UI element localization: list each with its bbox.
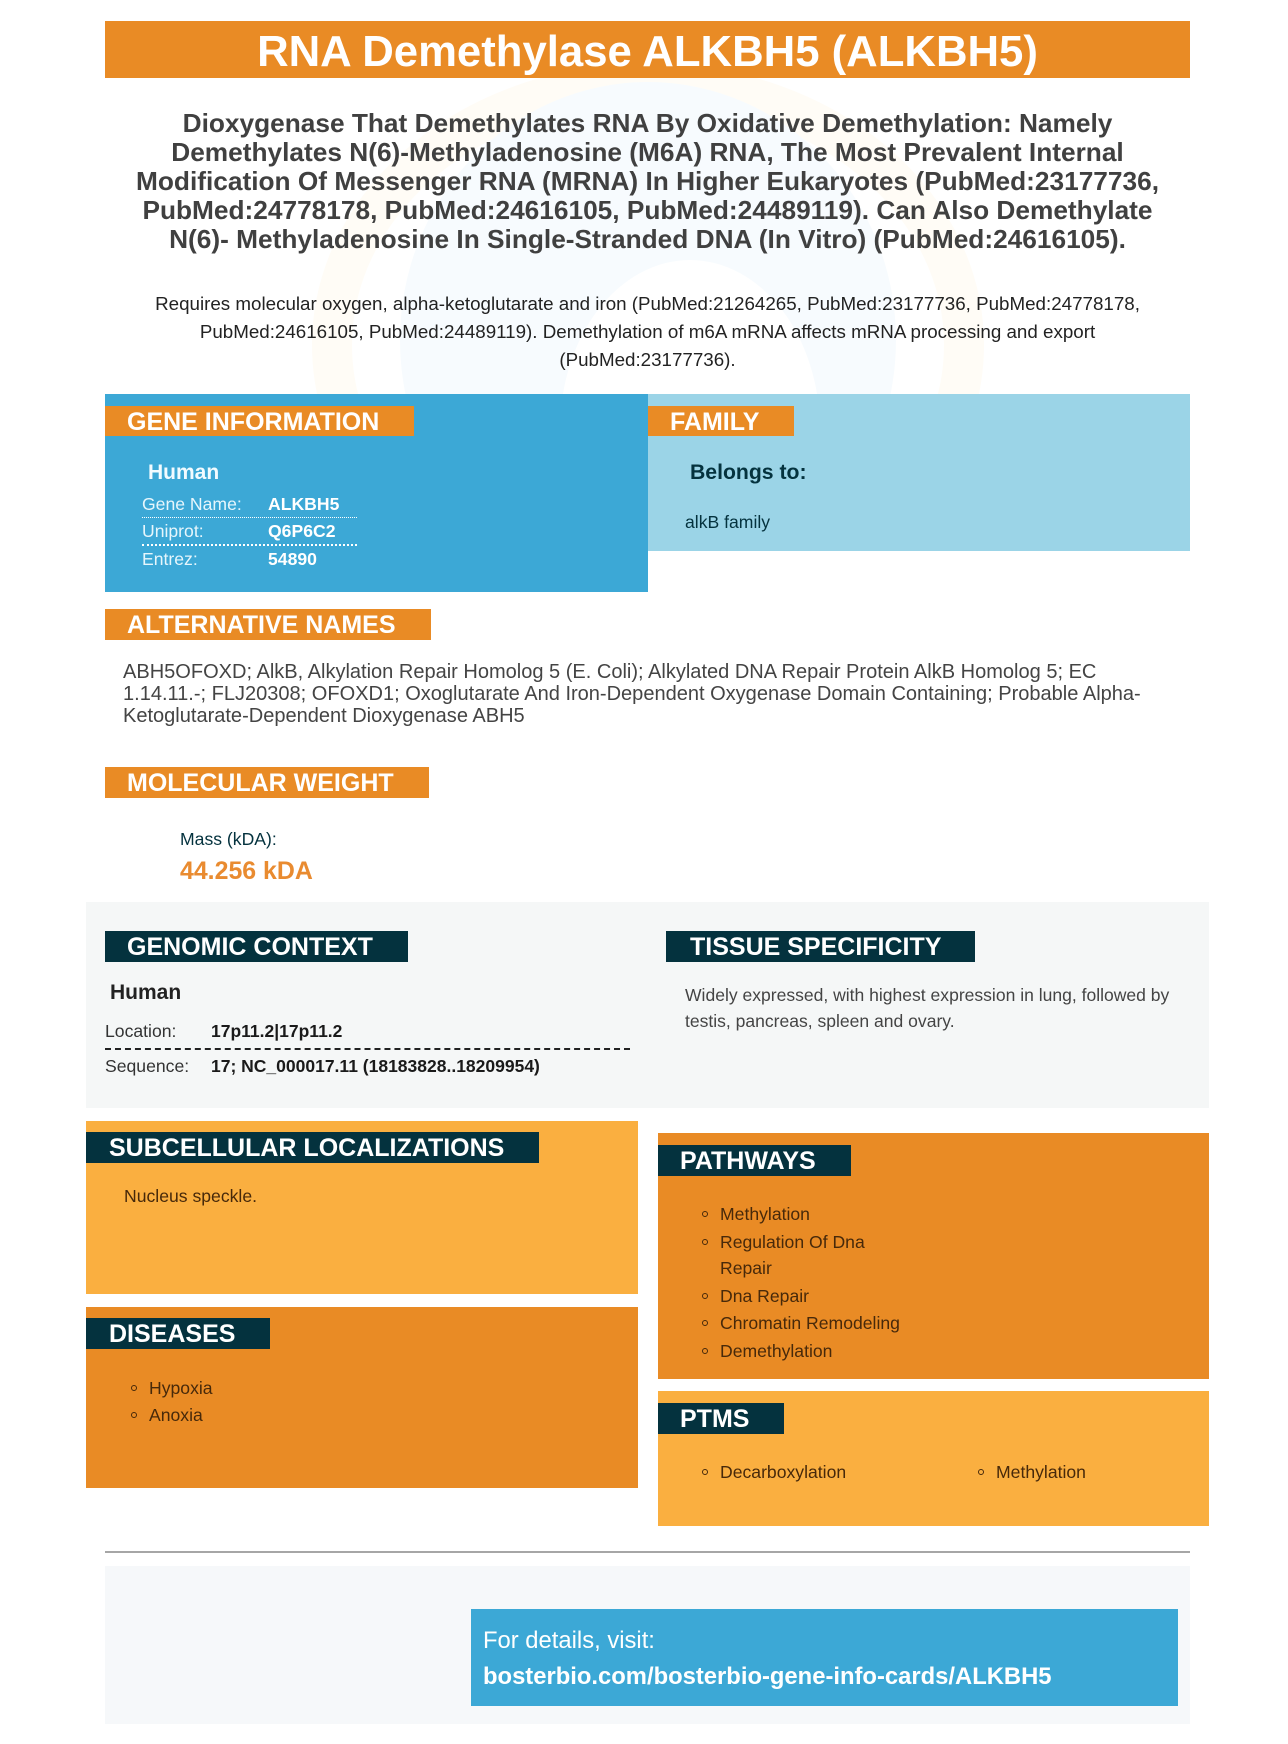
function paragraph	[155, 293, 1140, 370]
function paragraph: Requires molecular oxygen, alpha-ketoglutarate and iron (PubMed:21264265, PubMed:23177736, PubMed:24778178,	[155, 293, 1140, 314]
panel: gene information: ALKBH5	[268, 494, 339, 514]
belongs to label: Belongs to:	[690, 461, 807, 484]
heading: molecular weight: MOLECULAR WEIGHT	[127, 769, 394, 797]
alternative names text	[123, 661, 1141, 727]
subtitle description: PubMed:24778178, PubMed:24616105, PubMed:24489119). Can Also Demethylate	[142, 195, 1153, 225]
heading: family: FAMILY	[670, 408, 759, 436]
subtitle description: N(6)- Methyladenosine In Single-Stranded DNA (In Vitro) (PubMed:24616105).	[169, 224, 1126, 254]
heading: tissue specificity: TISSUE SPECIFICITY	[690, 933, 941, 961]
pathway list: Dna Repair	[720, 1286, 809, 1306]
heading: family	[648, 406, 794, 436]
disease list: Anoxia	[149, 1405, 203, 1425]
heading: genomic context: GENOMIC CONTEXT	[127, 933, 373, 961]
visit label: For details, visit:	[483, 1627, 655, 1654]
panel: family	[648, 394, 1190, 551]
pathway list: Demethylation	[720, 1341, 832, 1361]
function paragraph: PubMed:24616105, PubMed:24489119). Demethylation of m6A mRNA affects mRNA processing and export	[200, 321, 1095, 342]
panel: genomic context and tissue specificity	[86, 902, 1209, 1108]
panel: ptms	[658, 1391, 1209, 1526]
ptm list	[702, 1462, 1086, 1482]
family value: alkB family	[685, 512, 770, 532]
title banner: RNA Demethylase ALKBH5 (ALKBH5)	[257, 27, 1038, 76]
alternative names text: 1.14.11.-; FLJ20308; OFOXD1; Oxoglutarate And Iron-Dependent Oxygenase Domain Containing; Probable Alpha-	[123, 683, 1141, 705]
species label: Human	[148, 461, 219, 484]
callout: details link	[471, 1609, 1178, 1706]
uniprot row: Uniprot:	[142, 521, 204, 541]
pathway list: Methylation	[720, 1204, 810, 1224]
heading: pathways	[658, 1145, 851, 1176]
disease list: Hypoxia	[149, 1378, 213, 1398]
panel: pathways	[658, 1133, 1209, 1379]
panel: genomic context and tissue specificity: 17p11.2|17p11.2	[211, 1021, 342, 1041]
entrez row	[142, 549, 317, 569]
tissue text	[685, 985, 1170, 1031]
pathway list: Chromatin Remodeling	[720, 1313, 900, 1333]
panel: subcellular localizations	[86, 1121, 638, 1294]
panel: genomic context and tissue specificity: 17; NC_000017.11 (18183828..18209954)	[211, 1056, 540, 1076]
heading: gene information: GENE INFORMATION	[127, 408, 379, 436]
mass value: 44.256 kDA	[180, 857, 313, 885]
pathway list: Regulation Of Dna	[720, 1232, 865, 1252]
panel: footer	[105, 1566, 1190, 1724]
heading: diseases: DISEASES	[109, 1320, 235, 1348]
subtitle description: Demethylates N(6)-Methyladenosine (M6A) RNA, The Most Prevalent Internal	[171, 137, 1124, 167]
heading: subcellular localizations: SUBCELLULAR LOCALIZATIONS	[109, 1134, 504, 1162]
heading: ptms	[658, 1403, 784, 1434]
heading: ptms: PTMS	[680, 1405, 749, 1433]
mass label: Mass (kDA):	[180, 829, 277, 849]
ptm list: Methylation	[996, 1462, 1086, 1482]
tissue text: testis, pancreas, spleen and ovary.	[685, 1011, 955, 1031]
localization text: Nucleus speckle.	[124, 1186, 257, 1206]
background watermark	[312, 78, 984, 394]
subtitle description	[136, 108, 1159, 254]
location row: Location:	[105, 1021, 176, 1041]
panel: gene information: Q6P6C2	[268, 521, 335, 541]
species label: Human	[110, 981, 181, 1004]
ptm list: Decarboxylation	[720, 1462, 846, 1482]
location row	[105, 1021, 342, 1041]
sequence row: Sequence:	[105, 1056, 189, 1076]
gene name row	[142, 494, 339, 514]
panel: diseases	[86, 1307, 638, 1488]
alternative names text: Ketoglutarate-Dependent Dioxygenase ABH5	[123, 705, 525, 727]
gene name row: Gene Name:	[142, 494, 242, 514]
url: bosterbio.com/bosterbio-gene-info-cards/ALKBH5	[483, 1663, 1052, 1690]
pathway list	[702, 1204, 900, 1361]
panel: gene information: 54890	[268, 549, 317, 569]
entrez row: Entrez:	[142, 549, 198, 569]
heading: alternative names: ALTERNATIVE NAMES	[127, 611, 396, 639]
sequence row	[105, 1056, 540, 1076]
uniprot row	[142, 521, 335, 541]
subtitle description: Modification Of Messenger RNA (MRNA) In Higher Eukaryotes (PubMed:23177736,	[136, 166, 1159, 196]
title banner	[105, 21, 1190, 78]
alternative names text: ABH5OFOXD; AlkB, Alkylation Repair Homolog 5 (E. Coli); Alkylated DNA Repair Protein AlkB Homolog 5; EC	[123, 661, 1096, 683]
tissue text: Widely expressed, with highest expression in lung, followed by	[685, 985, 1169, 1005]
disease list	[131, 1378, 213, 1425]
function paragraph: (PubMed:23177736).	[559, 349, 736, 370]
heading: diseases	[86, 1318, 270, 1349]
heading: pathways: PATHWAYS	[680, 1147, 816, 1175]
pathway list: Repair	[720, 1258, 772, 1278]
panel: gene information	[105, 394, 648, 592]
subtitle description: Dioxygenase That Demethylates RNA By Oxidative Demethylation: Namely	[183, 108, 1112, 138]
